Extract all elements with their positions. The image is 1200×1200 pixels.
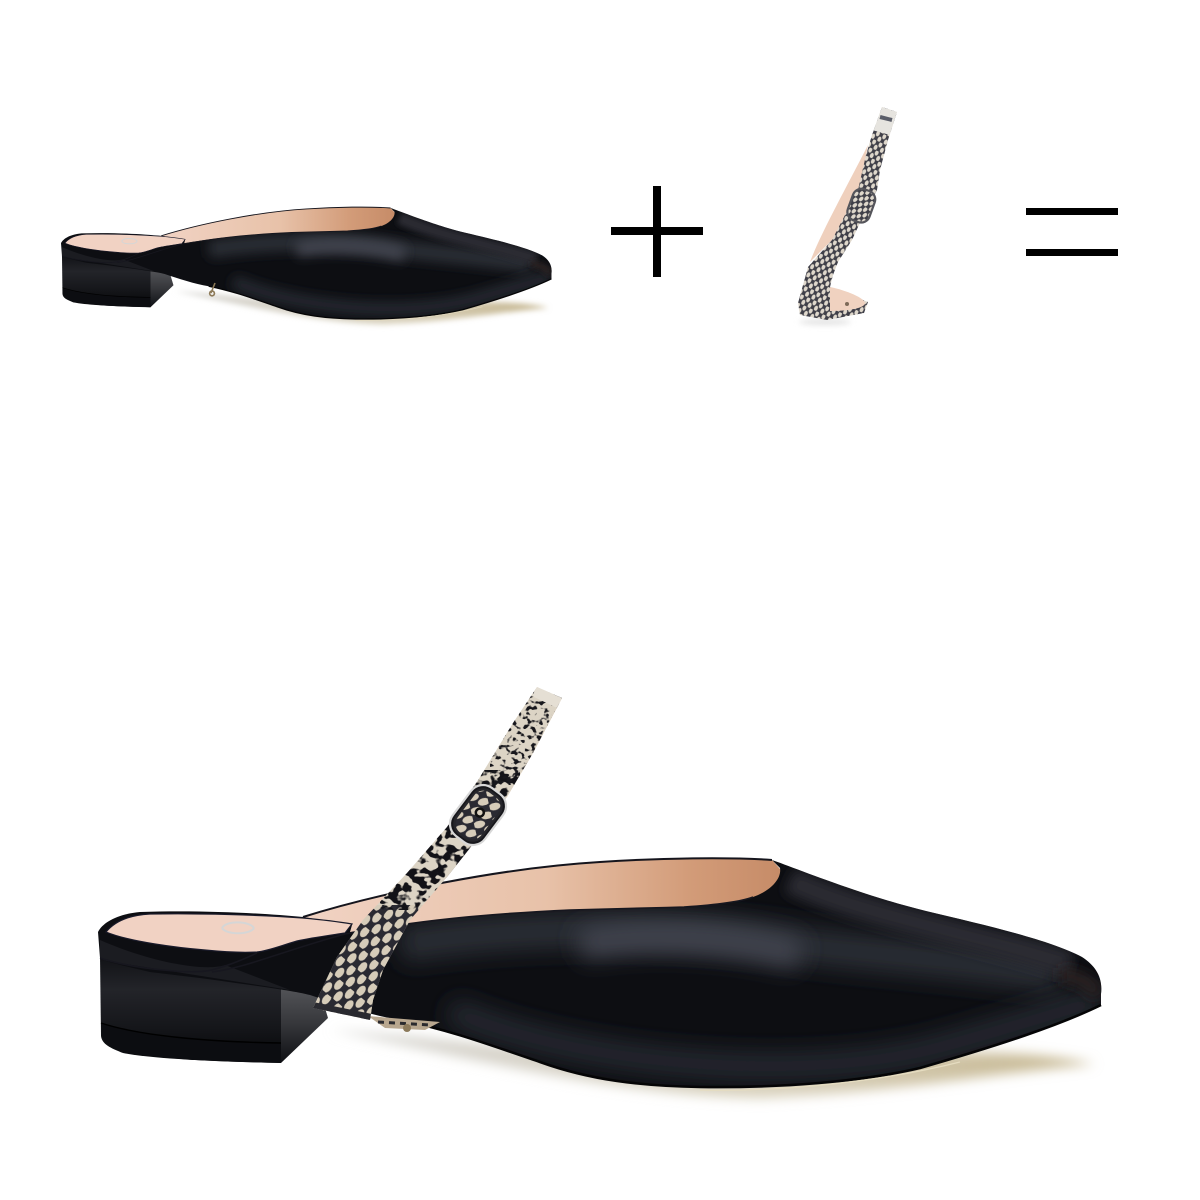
scale section [313,905,422,1020]
infographic canvas [61,107,1118,1105]
icon: small buckle pin [210,283,215,296]
strap lining [810,145,868,262]
plus sign [611,186,703,277]
snakeskin band [798,107,897,320]
snakeskin strap piece [798,107,897,326]
blotched middle section [380,770,520,910]
strap tan edge [503,696,562,797]
large mule shoe [98,858,1101,1098]
snakeskin strap [313,687,562,1020]
small mule shoe [61,207,552,324]
small buckle [845,186,878,225]
buckle [444,779,512,851]
strap foot [830,287,865,311]
speckled top section [490,685,565,785]
equals sign [1026,208,1118,256]
combined shoe with strap [98,680,1101,1098]
under-shoe strap end and pin [368,1016,440,1030]
